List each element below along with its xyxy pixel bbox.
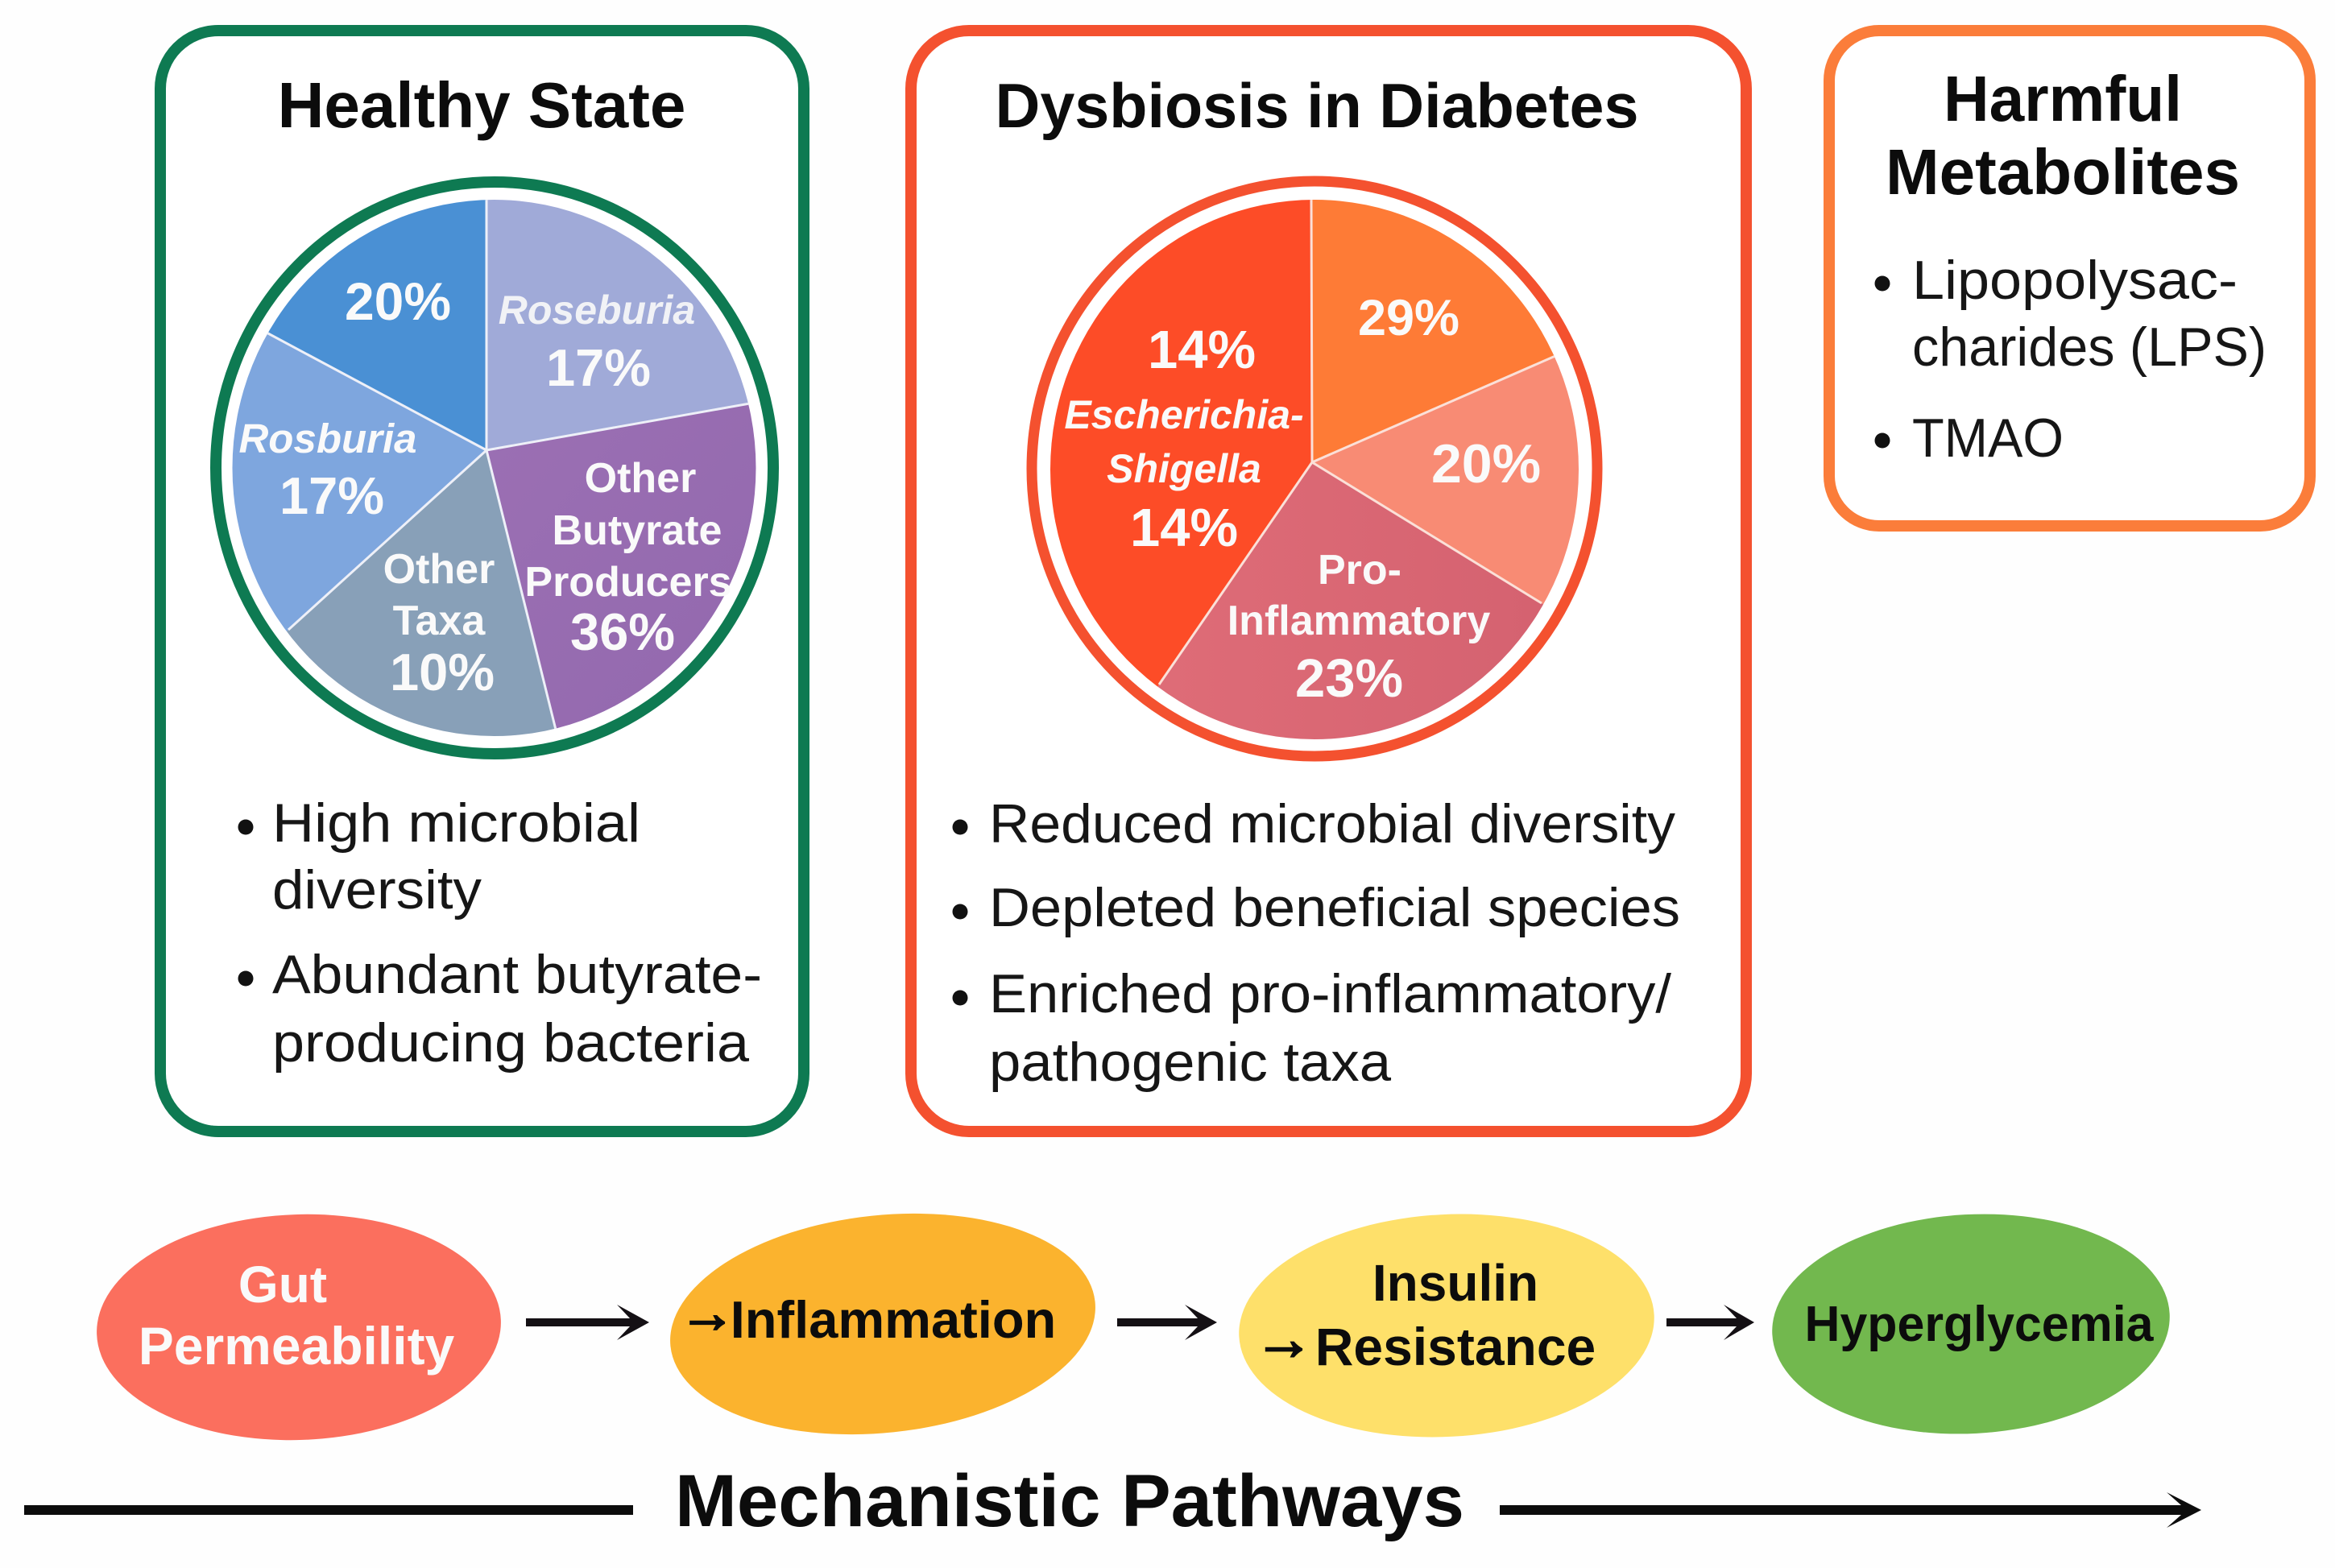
- heading: healthy state: Healthy State: [278, 69, 685, 141]
- label: Escherichia-Shigella 14%: Shigella: [1107, 446, 1261, 491]
- label: Roseburia 17%: 17%: [546, 338, 651, 397]
- panel: harmful metabolites: [1829, 31, 2310, 526]
- label: Other Taxa 10%: [383, 546, 495, 701]
- bullet list: dysbiosis traits: Enriched pro-inflammatory/: [989, 963, 1671, 1024]
- bullet list: metabolites: [1875, 250, 2267, 469]
- label: Pro-Inflammatory 23%: [1228, 547, 1490, 709]
- label: Other Butyrate Producers 36%: Butyrate: [553, 507, 722, 554]
- arrow: inflammation to insulin resistance: [1117, 1305, 1217, 1340]
- bullet list: dysbiosis traits: [952, 793, 1680, 1093]
- heading: dysbiosis in diabetes: Dysbiosis in Diabetes: [996, 70, 1638, 141]
- panel frame: green: [160, 31, 804, 1132]
- label: Other Butyrate Producers 36%: [524, 455, 732, 661]
- bullet list: healthy traits: producing bacteria: [272, 1012, 749, 1074]
- pie outer ring: [1032, 181, 1597, 756]
- panel frame: red: [911, 31, 1746, 1132]
- panel: dysbiosis in diabetes: [886, 31, 1799, 1132]
- pie chart: healthy microbiome: [210, 176, 779, 759]
- pathway: insulin resistance: →: [1254, 1305, 1314, 1372]
- heading: mechanistic pathways: Mechanistic Pathways: [675, 1460, 1464, 1542]
- label: Roseburia 17%: [499, 288, 695, 397]
- label: Other Butyrate Producers 36%: 36%: [570, 602, 675, 661]
- label: Escherichia-Shigella 14%: 14%: [1130, 498, 1238, 558]
- label: Rosburia 17%: 17%: [279, 466, 384, 525]
- pathway: gut permeability: Gut: [238, 1256, 327, 1314]
- heading: harmful metabolites: Metabolites: [1886, 136, 2240, 208]
- pie outer ring: [216, 182, 773, 754]
- heading: harmful metabolites: [1886, 63, 2240, 208]
- heading: harmful metabolites: Harmful: [1944, 63, 2182, 134]
- label: Other Butyrate Producers 36%: Other: [585, 455, 696, 502]
- bullet list: dysbiosis traits: pathogenic taxa: [989, 1032, 1391, 1093]
- label: Other Taxa 10%: Taxa: [393, 598, 486, 644]
- label: Rosburia 17%: [238, 416, 417, 525]
- bullet list: metabolites: Lipopolysac-: [1912, 250, 2238, 311]
- pathway: inflammation: [659, 1194, 1107, 1454]
- pathway: inflammation: →: [679, 1281, 735, 1344]
- pathway: insulin resistance: Resistance: [1315, 1317, 1596, 1376]
- panel frame: orange: [1829, 31, 2310, 526]
- label: Other Butyrate Producers 36%: Producers: [524, 559, 732, 606]
- label: Rosburia 17%: Rosburia: [238, 416, 417, 461]
- label: Roseburia 17%: Roseburia: [499, 288, 695, 333]
- bullet list: healthy traits: diversity: [272, 859, 482, 921]
- bullet list: healthy traits: [238, 792, 762, 1074]
- label: Pro-Inflammatory 23%: Inflammatory: [1228, 598, 1490, 644]
- pathway: insulin resistance: Insulin: [1372, 1254, 1538, 1312]
- label: Other Taxa 10%: 10%: [390, 643, 495, 701]
- pathway: gut permeability: [93, 1207, 505, 1447]
- pathway: gut permeability: Permeability: [139, 1316, 455, 1376]
- label: Pro-Inflammatory 23%: 23%: [1295, 648, 1403, 709]
- bullet list: metabolites: charides (LPS): [1912, 316, 2267, 378]
- label: 29%: 29%: [1358, 290, 1459, 346]
- axis line left: [24, 1505, 633, 1515]
- pie chart: dysbiosis microbiome: [1026, 176, 1603, 762]
- pathway: insulin resistance: [1233, 1204, 1660, 1447]
- bullet list: dysbiosis traits: Depleted beneficial species: [989, 877, 1680, 938]
- label: 20%: 20%: [1431, 433, 1541, 494]
- bullet list: healthy traits: Abundant butyrate-: [272, 944, 762, 1005]
- pathway: inflammation: Inflammation: [731, 1290, 1056, 1349]
- pie slices: [232, 200, 756, 736]
- bullet list: dysbiosis traits: Reduced microbial diversity: [989, 793, 1675, 854]
- bullet list: metabolites: TMAO: [1912, 408, 2064, 469]
- pathway: hyperglycemia: Hyperglycemia: [1804, 1297, 2154, 1352]
- label: 20%: 20%: [345, 271, 451, 331]
- label: Pro-Inflammatory 23%: Pro-: [1318, 547, 1401, 594]
- panel: healthy state: [155, 25, 809, 1137]
- axis arrow right: [1500, 1492, 2201, 1528]
- label: Escherichia-Shigella 14%: 14%: [1148, 320, 1256, 380]
- arrow: permeability to inflammation: [526, 1305, 649, 1340]
- label: Escherichia-Shigella 14%: Escherichia-: [1064, 392, 1304, 437]
- label: Other Taxa 10%: Other: [383, 546, 495, 593]
- bullet list: healthy traits: High microbial: [272, 792, 640, 854]
- arrow: insulin resistance to hyperglycemia: [1666, 1305, 1754, 1340]
- pie slices: [1050, 200, 1579, 739]
- pathway: hyperglycemia: [1766, 1204, 2176, 1444]
- label: Escherichia-Shigella 14%: [1064, 320, 1304, 558]
